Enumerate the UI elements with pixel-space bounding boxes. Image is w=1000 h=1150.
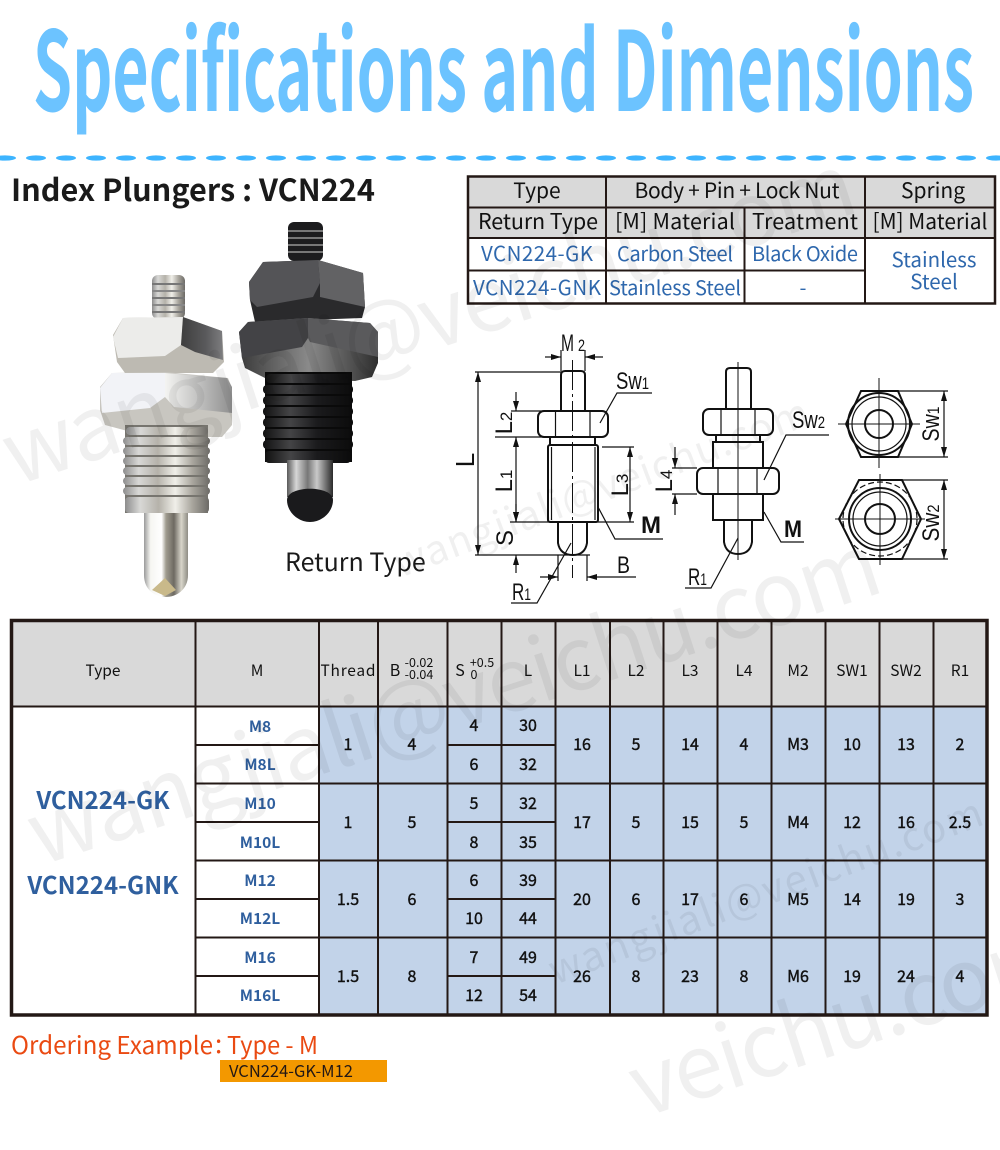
header row <box>86 652 969 683</box>
caption: return type: Return Type <box>285 543 426 579</box>
dimension: S: S <box>492 530 519 546</box>
plunger outline <box>538 360 608 578</box>
ordering example label: Ordering Example <box>11 1027 213 1062</box>
row group M16 values: 54 <box>519 982 537 1006</box>
technical drawing: top view Sw1 <box>838 378 948 468</box>
label: Sw1: Sw1 <box>616 368 649 395</box>
row group M16 values: 8 <box>408 963 417 987</box>
spring material <box>892 243 976 295</box>
header row 2: [M] Material <box>872 205 988 236</box>
lower nut <box>100 372 232 437</box>
technical drawing: top view Sw2 <box>835 474 948 565</box>
row group M12 values: 6 <box>632 886 641 910</box>
dimension: M2: M <box>561 330 574 357</box>
M sizes: M8L <box>244 753 276 775</box>
header row: R1 <box>951 659 969 681</box>
row group M12 values: 19 <box>897 886 915 910</box>
row group M10 values: 15 <box>681 809 699 833</box>
header row: B <box>390 657 400 681</box>
spring material: Stainless <box>892 243 976 273</box>
dimension: L3: L3 <box>607 474 634 496</box>
row group M16 values: 4 <box>956 963 965 987</box>
dimension: M2 <box>545 330 603 371</box>
stud thread <box>288 222 323 261</box>
row group M10 values: 5 <box>632 809 641 833</box>
header row: M <box>251 659 263 681</box>
header row: M2 <box>787 659 809 681</box>
row group M10 values: 35 <box>519 829 537 853</box>
row group M10 values <box>344 790 971 853</box>
dimension: L1: L1 <box>491 470 518 492</box>
label: M <box>598 507 663 539</box>
dimension: L4 <box>651 447 697 515</box>
row group M12 values: M5 <box>787 886 809 910</box>
dimension: L2: L2 <box>491 412 518 434</box>
row group M16 values: 26 <box>573 963 591 987</box>
header row: 0 <box>471 664 478 683</box>
type names <box>26 781 179 901</box>
hexagon <box>838 378 920 468</box>
upper nut <box>113 317 224 373</box>
row group M16 values: 23 <box>681 963 699 987</box>
dimension: L4: L4 <box>651 470 678 492</box>
row group M12 values: 10 <box>465 905 483 929</box>
header row: L1 <box>573 659 591 681</box>
row group M8 values: 13 <box>897 731 915 755</box>
row group M12 values: 14 <box>843 886 861 910</box>
header row 1: Spring <box>901 175 965 205</box>
watermarks: wangjiali@veichu.com <box>0 115 869 511</box>
label: M: M <box>784 516 802 543</box>
row group M8 values: 6 <box>470 751 479 775</box>
label: Sw2 <box>764 407 829 480</box>
body thread <box>263 372 353 463</box>
photo: black oxide plunger <box>239 222 378 522</box>
dimension: L: L <box>450 453 480 467</box>
header row: L <box>524 659 532 681</box>
dimension: L3 <box>602 447 634 522</box>
header row 2 <box>478 205 988 236</box>
table grid <box>468 176 995 304</box>
row group M10 values: 2.5 <box>949 809 971 833</box>
row group M16 values: 19 <box>843 963 861 987</box>
dimension: B <box>540 552 636 581</box>
dimension: M2: 2 <box>578 336 585 355</box>
header row 2: [M] Material <box>615 205 735 236</box>
M sizes: M16 <box>244 946 276 968</box>
header row: L4 <box>735 659 753 681</box>
watermarks: wangjiali@veichu.com <box>9 495 894 891</box>
row group M12 values <box>337 867 964 929</box>
ordering example label: Type - M <box>227 1027 318 1062</box>
row group M8 values: 16 <box>573 731 591 755</box>
header row 2: Return Type <box>478 205 598 236</box>
header row: Type <box>86 659 120 681</box>
watermarks: wangjiali@veichu.com <box>539 781 990 996</box>
dashed divider <box>0 155 1000 161</box>
label: R1 <box>511 543 571 606</box>
header row 1: Type <box>513 175 561 205</box>
row group M12 values: 6 <box>408 886 417 910</box>
upper nut <box>249 260 365 322</box>
row group M16 values: M6 <box>787 963 809 987</box>
ordering example label <box>11 1024 318 1062</box>
row group M12 values: 20 <box>573 886 591 910</box>
type names: VCN224-GNK <box>26 866 179 901</box>
table grid <box>12 620 987 1015</box>
watermarks: wangjiali@veichu.com <box>384 381 816 589</box>
table fills <box>12 621 987 1015</box>
row group M8 values: 4 <box>740 731 749 755</box>
photo: stainless steel plunger <box>100 275 232 597</box>
dimension: L2 <box>491 392 545 437</box>
type names: VCN224-GK <box>35 781 170 816</box>
row group M10 values: 8 <box>470 829 479 853</box>
row group M12 values: 6 <box>740 886 749 910</box>
row group M10 values: 32 <box>519 790 537 814</box>
dimension: B: B <box>617 552 630 579</box>
label: R1: R1 <box>688 564 707 591</box>
row group M10 values: 1 <box>344 809 352 833</box>
M sizes: M16L <box>240 984 280 1006</box>
material table <box>468 175 995 304</box>
row group M10 values: 12 <box>843 809 861 833</box>
header row 1 <box>513 175 965 205</box>
technical drawing: plunger with two nuts <box>651 362 829 591</box>
M sizes: M12 <box>244 869 276 891</box>
header row: SW2 <box>890 659 922 681</box>
plunger outline <box>697 362 779 560</box>
header row: -0.04 <box>405 664 433 683</box>
ordering example value: VCN224-GK-M12 <box>229 1058 353 1082</box>
row group M16 values: 8 <box>632 963 641 987</box>
spring pin <box>287 460 333 522</box>
row: VCN224-GK: VCN224-GK <box>481 237 594 267</box>
dimension: Sw1: Sw1 <box>918 406 945 442</box>
hexagon <box>835 474 925 565</box>
row group M10 values: 5 <box>470 790 479 814</box>
row group M8 values: 32 <box>519 751 537 775</box>
label: R1: R1 <box>512 579 531 606</box>
row group M10 values: M4 <box>787 809 809 833</box>
row: VCN224-GK <box>481 237 858 267</box>
row group M10 values: 5 <box>408 809 417 833</box>
row: VCN224-GNK: - <box>800 272 807 301</box>
technical drawing: plunger with one nut <box>450 330 663 606</box>
cell backgrounds <box>468 177 995 304</box>
row group M8 values <box>344 712 965 775</box>
row group M16 values: 49 <box>519 944 537 968</box>
row: VCN224-GNK: VCN224-GNK <box>473 271 602 301</box>
header row: +0.5 <box>470 652 494 671</box>
row group M8 values: M3 <box>787 731 809 755</box>
ordering example label: : <box>215 1024 222 1061</box>
header row 1: Body + Pin + Lock Nut <box>634 175 840 205</box>
row group M8 values: 5 <box>632 731 641 755</box>
row group M16 values: 1.5 <box>337 963 359 987</box>
row group M12 values: 3 <box>956 886 964 910</box>
header row: Thread <box>320 659 376 681</box>
header row: SW1 <box>836 659 868 681</box>
heading: product name: Index Plungers : VCN224 <box>11 166 375 210</box>
row group M10 values: 16 <box>897 809 915 833</box>
row: VCN224-GK: Black Oxide <box>752 238 858 267</box>
row group M10 values: 5 <box>740 809 749 833</box>
row group M8 values: 4 <box>470 712 479 736</box>
row group M12 values: 17 <box>681 886 699 910</box>
header row: L2 <box>627 659 645 681</box>
M sizes: M12L <box>240 907 280 929</box>
dimension: S <box>492 504 519 573</box>
M sizes: M8 <box>249 715 271 737</box>
dimensions table <box>12 620 987 1015</box>
row group M16 values: 7 <box>470 944 479 968</box>
label: M <box>764 512 804 543</box>
row group M8 values: 1 <box>344 731 352 755</box>
label: R1 <box>685 538 738 591</box>
row group M12 values: 6 <box>470 867 479 891</box>
header row: L3 <box>681 659 699 681</box>
row group M8 values: 10 <box>843 731 861 755</box>
M sizes: M10L <box>240 831 280 853</box>
row group M12 values: 44 <box>519 905 537 929</box>
row group M12 values: 1.5 <box>337 886 359 910</box>
label: Sw2: Sw2 <box>792 407 825 434</box>
row group M16 values <box>337 944 965 1006</box>
label: Sw1 <box>600 368 652 423</box>
header row: -0.02 <box>405 652 433 671</box>
header row 2: Treatment <box>752 205 858 236</box>
row: VCN224-GK: Carbon Steel <box>617 238 733 267</box>
spring pin <box>144 513 188 597</box>
M sizes <box>240 715 280 1006</box>
row group M8 values: 30 <box>519 712 537 736</box>
row group M10 values: 17 <box>573 809 591 833</box>
M sizes: M10 <box>244 792 276 814</box>
body thread <box>123 425 210 513</box>
row group M16 values: 12 <box>465 982 483 1006</box>
row group M16 values: 24 <box>897 963 915 987</box>
lower nut <box>239 318 378 381</box>
row group M16 values: 8 <box>740 963 749 987</box>
dimension: Sw2: Sw2 <box>918 504 945 542</box>
row group M12 values: 39 <box>519 867 537 891</box>
row: VCN224-GNK: Stainless Steel <box>609 272 741 301</box>
header row: S <box>455 657 465 681</box>
stud thread <box>152 275 185 319</box>
row group M8 values: 4 <box>408 731 417 755</box>
row group M8 values: 2 <box>956 731 965 755</box>
row: VCN224-GNK <box>473 271 807 301</box>
spring material: Steel <box>910 265 958 295</box>
label: M: M <box>641 512 661 539</box>
row group M8 values: 14 <box>681 731 699 755</box>
